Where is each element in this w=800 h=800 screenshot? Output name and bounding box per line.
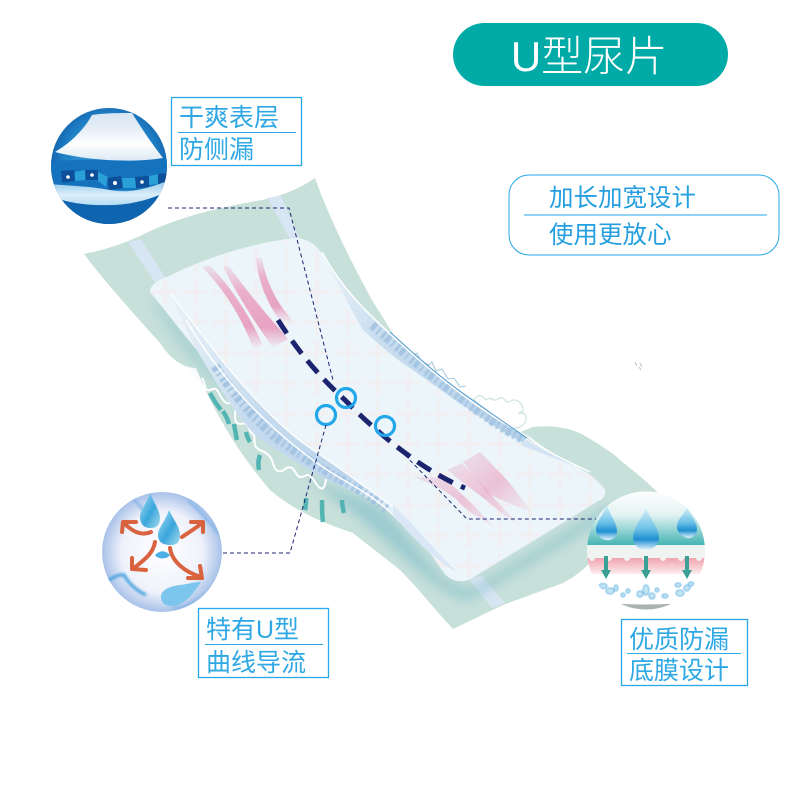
- absorbent beads: [50, 158, 170, 190]
- pink stripes top: [202, 258, 294, 348]
- label: leak-proof film: [622, 620, 748, 686]
- ruffle upper right: [400, 345, 526, 428]
- title pill: [453, 23, 728, 86]
- callout: longer and wider design: 使用更放心: [549, 221, 672, 249]
- channel shapes: [106, 575, 146, 595]
- orange arrows: [122, 522, 203, 578]
- callout: longer and wider design: 加长加宽设计: [549, 184, 696, 212]
- pad body: [150, 238, 605, 581]
- pink stripes bottom: [413, 452, 532, 530]
- label: dry surface: [172, 98, 302, 166]
- ring markers: [316, 388, 394, 436]
- speck: [635, 362, 642, 370]
- label: dry surface: 干爽表层: [179, 104, 279, 132]
- callout: longer and wider design: [509, 175, 779, 255]
- side bands: [128, 239, 168, 290]
- water drops: [140, 493, 160, 528]
- label: U-curve: 特有U型: [206, 616, 299, 644]
- green arrows: [601, 556, 692, 579]
- pad illustration: [84, 178, 658, 629]
- U-curve dashed line: [278, 320, 465, 488]
- top sheet: [55, 113, 163, 161]
- label: leak-proof film: 优质防漏: [629, 626, 729, 654]
- circle: leak-proof film: [587, 490, 705, 612]
- label: dry surface: 防侧漏: [179, 136, 254, 164]
- label: U-curve: [198, 608, 328, 678]
- bubbles: [599, 582, 694, 599]
- drops: [596, 505, 617, 540]
- ruffle lower left: [202, 378, 344, 522]
- circle: U-curve guiding: [102, 492, 225, 612]
- green backsheet: [84, 178, 662, 629]
- leader lines: [168, 208, 597, 553]
- label: leak-proof film: 底膜设计: [629, 657, 729, 685]
- title pill: U型尿片: [511, 33, 667, 80]
- lower cuff: [170, 293, 457, 572]
- layers: [587, 545, 705, 556]
- wave layer: [54, 182, 165, 206]
- upper cuff: [318, 248, 590, 472]
- pad shadow: [150, 292, 612, 600]
- label: U-curve: 曲线导流: [206, 649, 306, 677]
- circle: dry surface layer: [50, 107, 170, 227]
- quilted grid: [152, 239, 594, 578]
